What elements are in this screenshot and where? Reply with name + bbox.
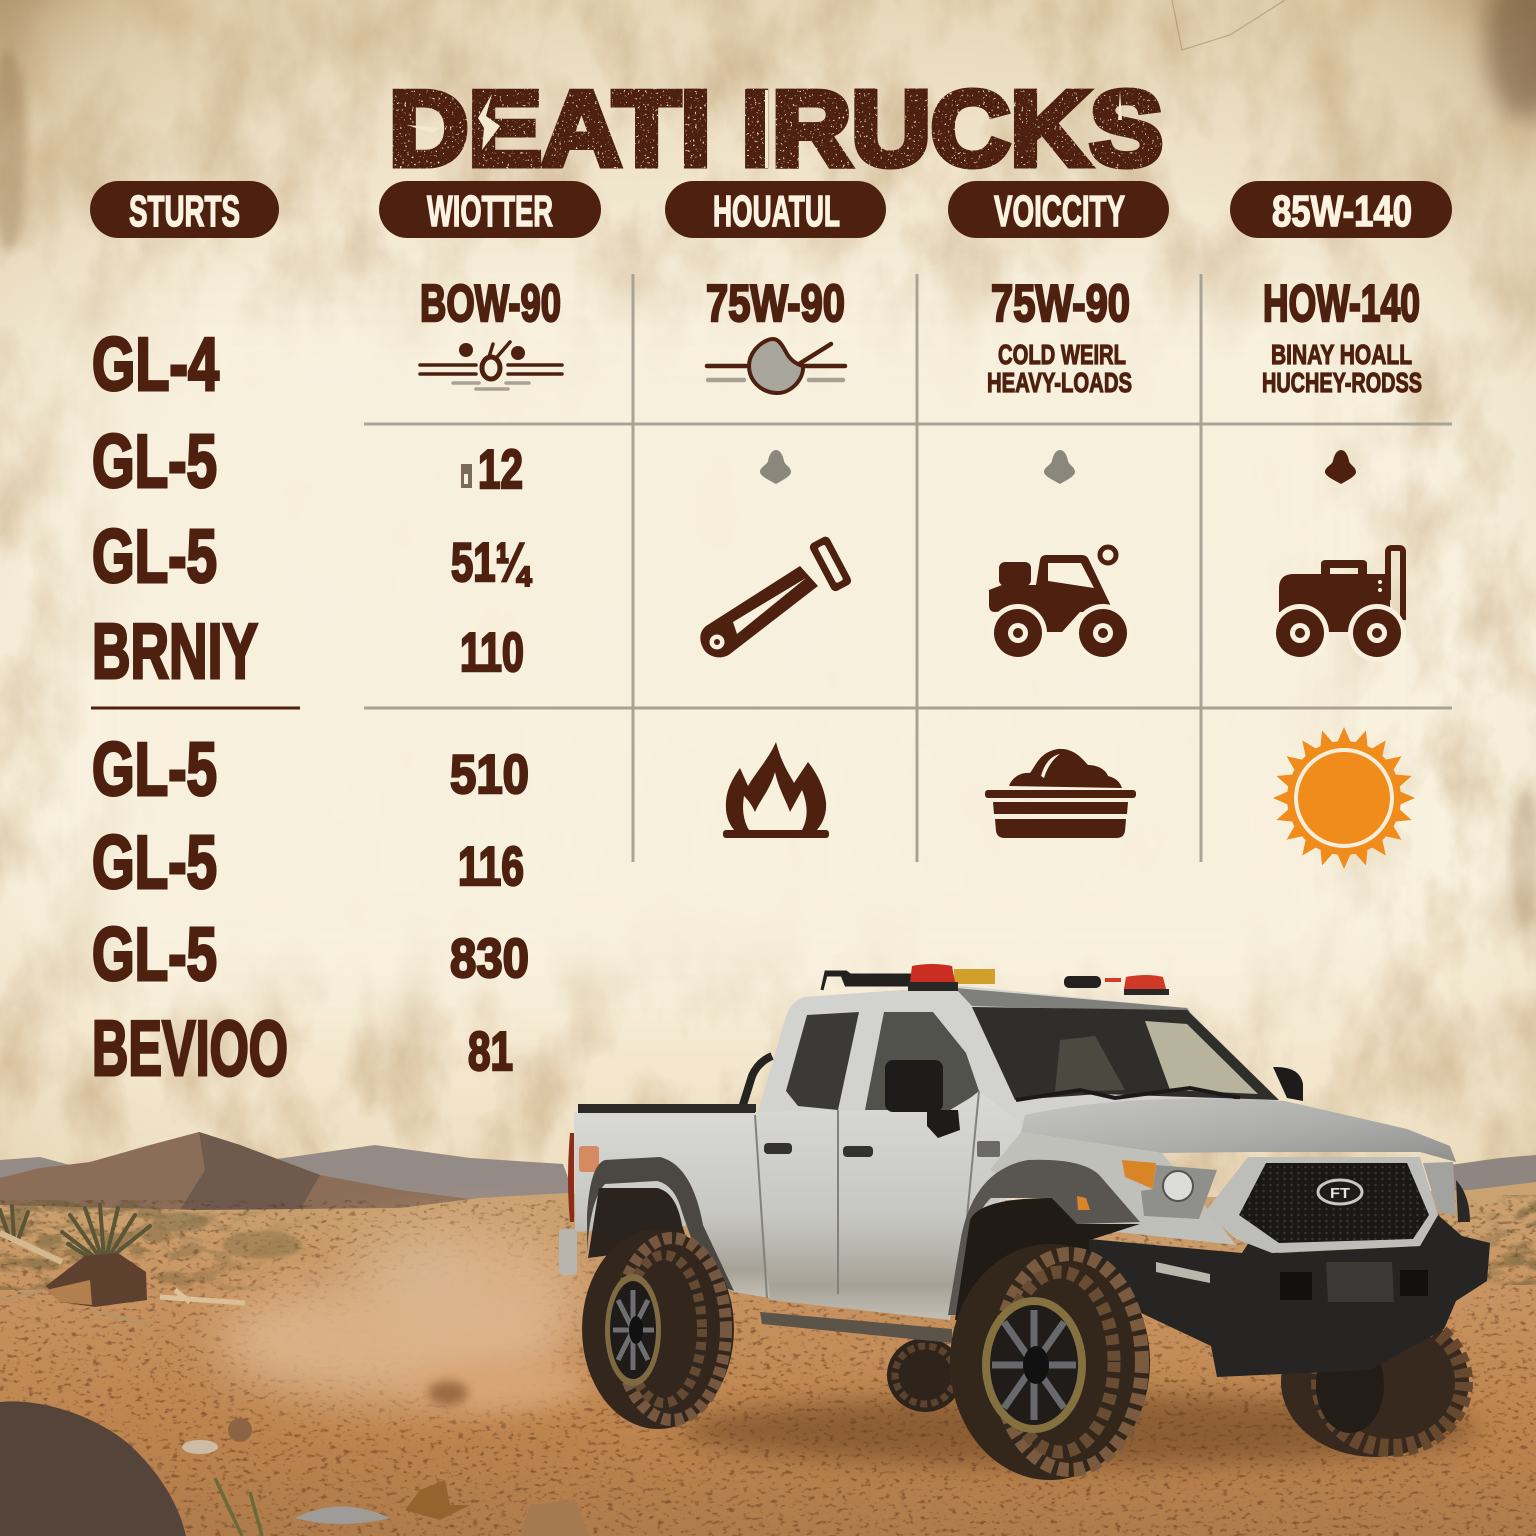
column notes — [987, 339, 1422, 398]
row values: 110 — [460, 621, 524, 683]
row labels: GL-5 — [92, 912, 217, 996]
scrub brush — [0, 1195, 1536, 1290]
icon: gray bearing — [707, 339, 845, 393]
icon: flame — [723, 742, 829, 838]
column headings: 75W-90 — [706, 275, 845, 333]
roof shade — [955, 988, 1190, 1012]
column headings: BOW-90 — [420, 275, 561, 333]
desert landscape — [0, 1132, 1536, 1536]
icon: truck with cab — [989, 547, 1132, 662]
badge: FT — [1330, 1185, 1350, 1202]
front wheel well — [955, 1198, 1140, 1320]
nose panel — [990, 1132, 1236, 1245]
ground shadow — [680, 1394, 1480, 1466]
roof lights — [908, 964, 1169, 995]
row labels: GL-4 — [92, 322, 219, 406]
windshield — [972, 1007, 1279, 1100]
row values: 116 — [458, 835, 524, 897]
pill: HOUATUL — [665, 181, 886, 238]
rear wheel well — [588, 1188, 700, 1280]
hood — [1021, 1098, 1456, 1162]
pill: 85W-140: 85W-140 — [1272, 187, 1412, 236]
column notes: HUCHEY-RODSS — [1262, 367, 1422, 398]
side windows — [786, 1012, 859, 1110]
pill: STURTS: STURTS — [129, 187, 240, 236]
bed — [574, 1112, 770, 1298]
title scratches — [407, 90, 1122, 168]
icon: drop 2 — [1044, 450, 1075, 484]
icon: bowl of grease — [985, 749, 1136, 838]
rear tire — [582, 1229, 734, 1429]
boulder and sticks — [0, 1233, 245, 1325]
pill: 85W-140 — [1230, 181, 1452, 238]
row labels — [92, 322, 288, 1092]
roof racks — [822, 972, 1101, 990]
column notes: HEAVY-LOADS — [987, 367, 1132, 398]
foreground rock — [0, 1401, 186, 1536]
headlights — [1122, 1160, 1470, 1222]
rear fender flare — [587, 1157, 734, 1291]
row values: 81 — [468, 1020, 513, 1082]
mountains — [0, 1132, 1536, 1212]
column notes: COLD WEIRL — [998, 339, 1126, 370]
row labels: BRNIY — [92, 607, 258, 695]
row labels: GL-5 — [92, 419, 217, 503]
row labels: GL-5 — [92, 514, 217, 598]
row values: 830 — [450, 927, 529, 989]
column notes: BINAY HOALL — [1271, 339, 1412, 370]
pill: HOUATUL: HOUATUL — [713, 187, 840, 236]
row values: 12 — [478, 438, 523, 500]
doors — [755, 1092, 1030, 1320]
pill: VOICCITY — [948, 181, 1169, 238]
front tire — [950, 1244, 1150, 1480]
bumper — [1089, 1215, 1490, 1377]
pill: WIOTTER: WIOTTER — [427, 187, 553, 236]
header pills — [90, 181, 1452, 238]
icon: drop 1 — [760, 450, 791, 484]
icon: drop 3 — [1325, 450, 1356, 484]
roll bar — [742, 1056, 772, 1108]
pill: WIOTTER — [379, 181, 601, 238]
pill: STURTS — [90, 181, 279, 238]
icon: sun — [1273, 727, 1415, 869]
mirrors — [885, 1060, 1303, 1138]
row labels: GL-5 — [92, 820, 217, 904]
small marker — [461, 464, 472, 488]
column headings: 75W-90 — [991, 275, 1130, 333]
icon: tank tractor — [1271, 548, 1406, 662]
grille surround — [1205, 1157, 1438, 1253]
door handles — [764, 1141, 1000, 1157]
icon: hammer tool — [700, 535, 853, 657]
table grid — [91, 274, 1452, 862]
ground — [0, 1182, 1536, 1536]
column headings — [420, 275, 1420, 333]
row values: 510 — [450, 743, 529, 805]
front fender flare — [948, 1160, 1140, 1315]
grille mesh — [1239, 1163, 1429, 1243]
row labels: BEVIOO — [92, 1004, 288, 1092]
running board — [760, 1312, 952, 1343]
row values — [450, 438, 532, 1082]
far tires — [887, 1307, 1469, 1457]
pill: VOICCITY: VOICCITY — [994, 187, 1125, 236]
dust cloud — [215, 1228, 590, 1411]
column headings: HOW-140 — [1263, 275, 1420, 333]
badge — [1318, 1180, 1362, 1204]
row values: 51¼ — [451, 531, 532, 593]
cab — [758, 986, 1282, 1300]
icon: gear oil ring — [420, 342, 562, 389]
title: DEATI IRUCKS — [389, 70, 1163, 188]
pickup truck — [559, 964, 1490, 1480]
rear bumper — [559, 1229, 577, 1275]
debris — [182, 1381, 590, 1536]
row labels: GL-5 — [92, 727, 217, 811]
